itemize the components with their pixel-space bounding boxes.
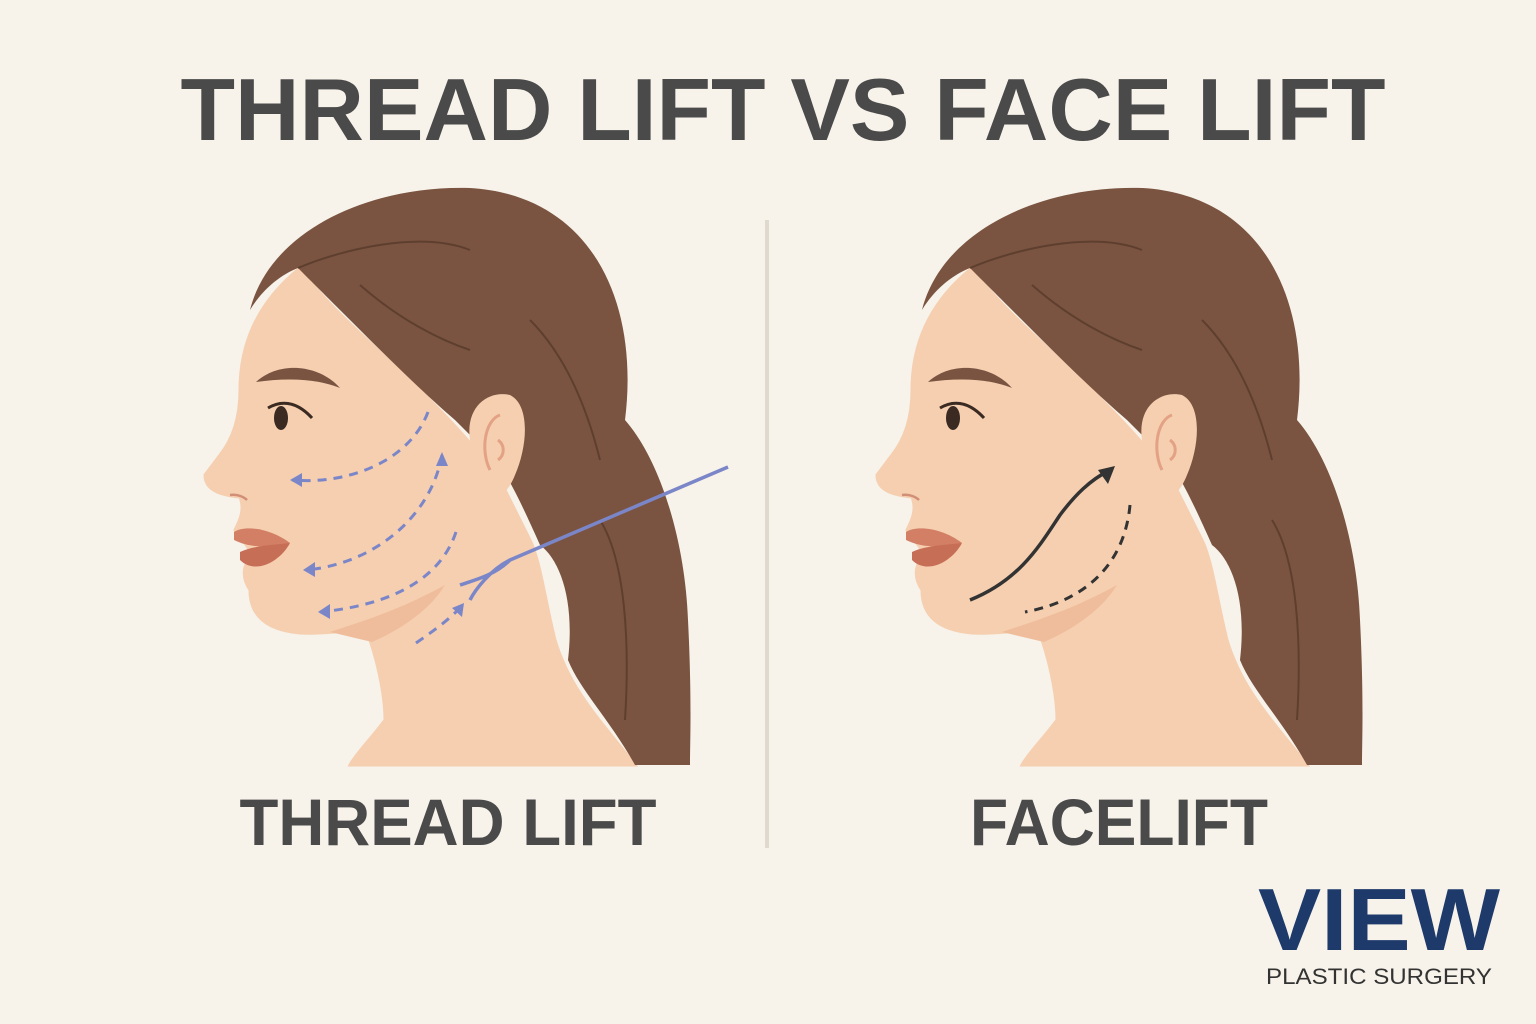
panel: thread lift figure [205, 188, 728, 765]
incision arrow [970, 470, 1110, 600]
label: facelift: FACELIFT [970, 785, 1268, 859]
thread lines (dashed arrows) [292, 412, 462, 643]
panel: facelift figure [877, 188, 1362, 765]
divider [765, 220, 769, 848]
cannula [460, 467, 728, 600]
label: thread lift: THREAD LIFT [240, 785, 656, 859]
dashed incision [1025, 505, 1130, 612]
title: THREAD LIFT VS FACE LIFT [180, 60, 1386, 159]
logo: VIEW [1258, 870, 1500, 969]
logo: PLASTIC SURGERY [1266, 964, 1492, 989]
